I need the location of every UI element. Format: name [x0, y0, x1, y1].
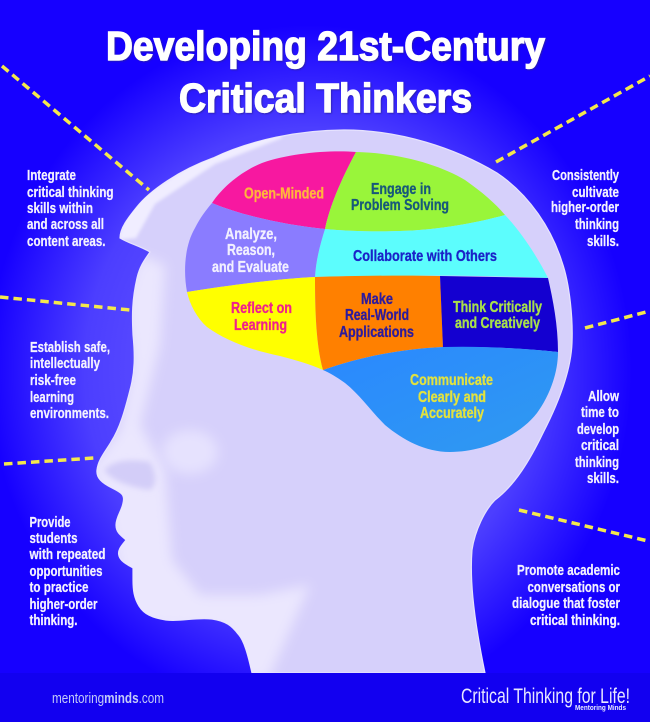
- segment: Make Real-World Applications: Applications: [339, 324, 414, 341]
- text block: Promote academic conversations: dialogue that foster: [512, 596, 620, 612]
- text block: Integrate critical thinking: [27, 168, 114, 250]
- segment: Engage in Problem Solving: Engage in: [371, 181, 431, 198]
- segment: Communicate Clearly and Accurately: Communicate: [410, 372, 493, 389]
- segment: Communicate Clearly and Accurately: Clearly and: [418, 389, 486, 406]
- text block: Consistently cultivate: higher-order: [551, 200, 619, 216]
- segment: Reflect on Learning: Learning: [234, 317, 287, 334]
- text block: Allow time: Allow: [588, 389, 620, 405]
- text block: Integrate critical thinking: content areas.: [27, 234, 106, 250]
- segment: Reflect on Learning: Reflect on: [231, 300, 292, 317]
- text block: Provide repeated opportunities: higher-order: [30, 597, 98, 613]
- text block: Establish safe environments: risk-free: [30, 373, 76, 389]
- text block: Establish safe environments: environments.: [30, 406, 109, 422]
- segment: Analyze, Reason, and Evaluate: Reason,: [227, 242, 275, 259]
- text block: Consistently cultivate: skills.: [587, 234, 619, 250]
- segment: Collaborate with Others: [315, 215, 548, 278]
- title: Critical Thinkers: [179, 75, 472, 121]
- segment: Think Critically and Creatively: and Creatively: [455, 315, 540, 332]
- head silhouette: [90, 130, 572, 680]
- segment: Make Real-World Applications: [315, 276, 443, 370]
- text block: Establish safe environments: intellectually: [30, 356, 100, 372]
- segment: Communicate Clearly and Accurately: Accurately: [420, 405, 484, 422]
- segment: Make Real-World Applications: Make: [361, 291, 393, 308]
- segment: Analyze, Reason, and Evaluate: [185, 203, 325, 292]
- segment: Open-Minded: Open-Minded: [244, 186, 324, 202]
- title: [106, 23, 545, 121]
- text block: Provide repeated opportunities: [29, 515, 106, 629]
- text block: Allow time: critical: [581, 438, 619, 454]
- text block: Establish safe environments: Establish safe,: [30, 340, 110, 356]
- text block: Consistently cultivate: [551, 168, 619, 250]
- text block: Integrate critical thinking: critical thinking: [27, 185, 114, 201]
- footer band: [0, 673, 650, 722]
- title: Developing 21st-Century: [106, 23, 545, 69]
- segment: Make Real-World Applications: Real-World: [345, 307, 409, 324]
- text block: Consistently cultivate: Consistently: [552, 168, 619, 184]
- segment: Communicate Clearly and Accurately: [323, 347, 558, 452]
- text block: Allow time: develop: [577, 422, 619, 438]
- text block: Integrate critical thinking: and across all: [27, 217, 104, 233]
- segment: Analyze, Reason, and Evaluate: and Evaluate: [212, 259, 289, 276]
- text block: Integrate critical thinking: Integrate: [27, 168, 76, 184]
- text block: Establish safe environments: learning: [30, 390, 74, 406]
- text block: Provide repeated opportunities: with repeated: [29, 547, 106, 563]
- text block: Consistently cultivate: cultivate: [572, 185, 619, 201]
- brain map: [185, 151, 558, 452]
- footer logo: Mentoring Minds: [575, 705, 626, 712]
- segment: Reflect on Learning: [187, 277, 323, 370]
- text block: Provide repeated opportunities: opportunities: [30, 564, 102, 580]
- footer url: mentoringminds.com: [52, 690, 164, 707]
- text block: Allow time: time to: [581, 405, 619, 421]
- text block: Provide repeated opportunities: students: [30, 531, 78, 547]
- text block: Provide repeated opportunities: thinking.: [30, 613, 78, 629]
- text block: Promote academic conversations: [512, 563, 620, 629]
- text block: Integrate critical thinking: skills within: [27, 201, 93, 217]
- segment: Think Critically and Creatively: Think Critically: [453, 299, 542, 316]
- segment: Engage in Problem Solving: [325, 152, 505, 231]
- text block: Promote academic conversations: critical thinking.: [530, 613, 620, 629]
- segment: Engage in Problem Solving: Problem Solving: [351, 197, 449, 214]
- text block: Allow time: [575, 389, 620, 487]
- dashed rays: [0, 66, 650, 541]
- segment: Think Critically and Creatively: [440, 276, 558, 352]
- segment: Analyze, Reason, and Evaluate: Analyze,: [225, 226, 277, 243]
- text block: Promote academic conversations: Promote academic: [517, 563, 620, 579]
- text block: Consistently cultivate: thinking: [575, 217, 619, 233]
- text block: Allow time: skills.: [587, 471, 619, 487]
- segment: Open-Minded: [212, 151, 356, 229]
- text block: Provide repeated opportunities: Provide: [30, 515, 70, 531]
- text block: Provide repeated opportunities: to practice: [30, 580, 88, 596]
- segment: Collaborate with Others: Collaborate with Others: [353, 248, 497, 265]
- text block: Allow time: thinking: [575, 455, 619, 471]
- text block: Promote academic conversations: conversations or: [528, 580, 620, 596]
- text block: Establish safe environments: [30, 340, 110, 422]
